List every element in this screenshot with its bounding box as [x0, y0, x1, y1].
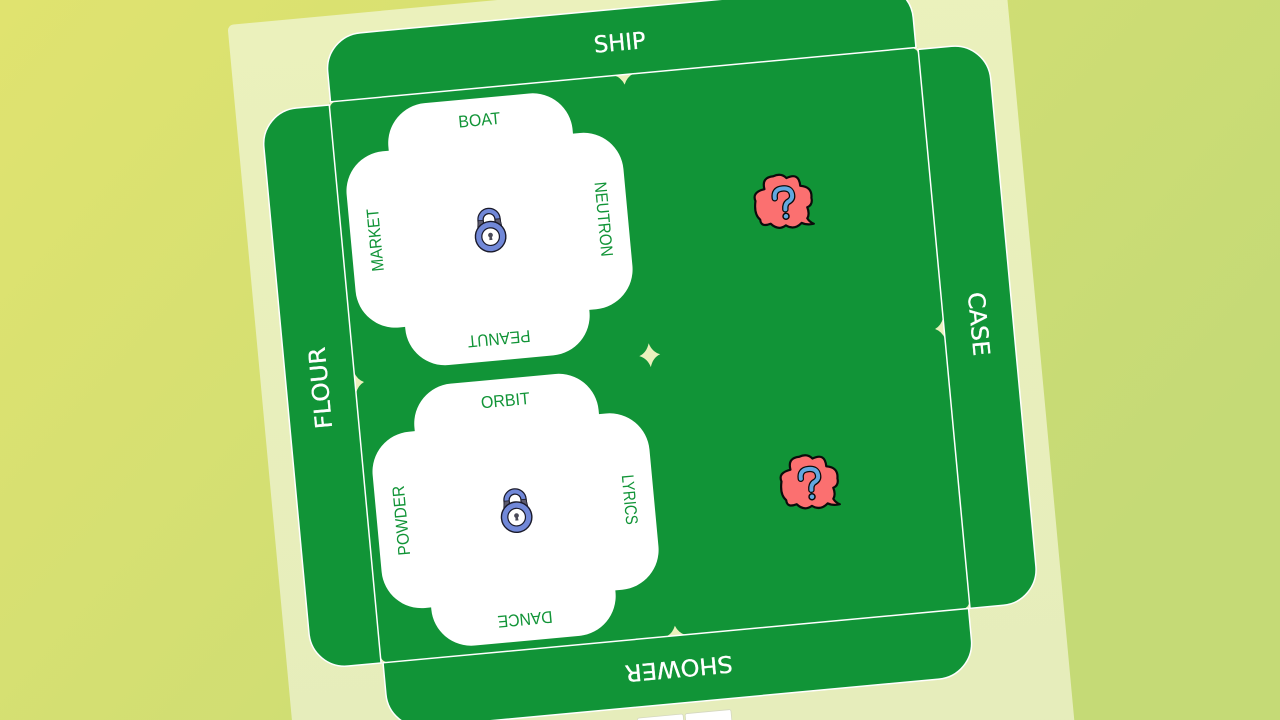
- center panel: [329, 47, 970, 663]
- icon: question bubble bottom: [778, 452, 840, 511]
- tab: flour: FLOUR: [305, 346, 338, 430]
- card: bottom left: POWDER: [389, 485, 414, 556]
- paper sheet: [227, 0, 1086, 720]
- footer tab buttons: [637, 709, 735, 720]
- icon: question bubble top: [752, 172, 814, 231]
- tab: flour: [261, 105, 381, 669]
- card: bottom left: [365, 366, 666, 653]
- card: bottom left: LYRICS: [618, 474, 641, 525]
- card: bottom left: DANCE: [497, 607, 553, 631]
- card: bottom left: ORBIT: [480, 389, 531, 412]
- icon: padlock: [473, 210, 507, 253]
- rotated sheet: [227, 0, 1086, 720]
- tab: shower: [383, 608, 975, 720]
- card: top left: NEUTRON: [591, 181, 616, 257]
- tab: case: [918, 43, 1039, 608]
- card: top left: [339, 85, 640, 373]
- tab: case: CASE: [962, 291, 994, 357]
- card: top left: BOAT: [458, 109, 501, 132]
- tab: ship: [324, 0, 916, 102]
- fold stars: [329, 47, 970, 663]
- tab: shower: SHOWER: [624, 650, 734, 686]
- tab: ship: SHIP: [593, 28, 647, 59]
- card: top left: PEANUT: [467, 326, 531, 351]
- icon: padlock: [499, 490, 533, 534]
- card: top left: MARKET: [363, 208, 388, 272]
